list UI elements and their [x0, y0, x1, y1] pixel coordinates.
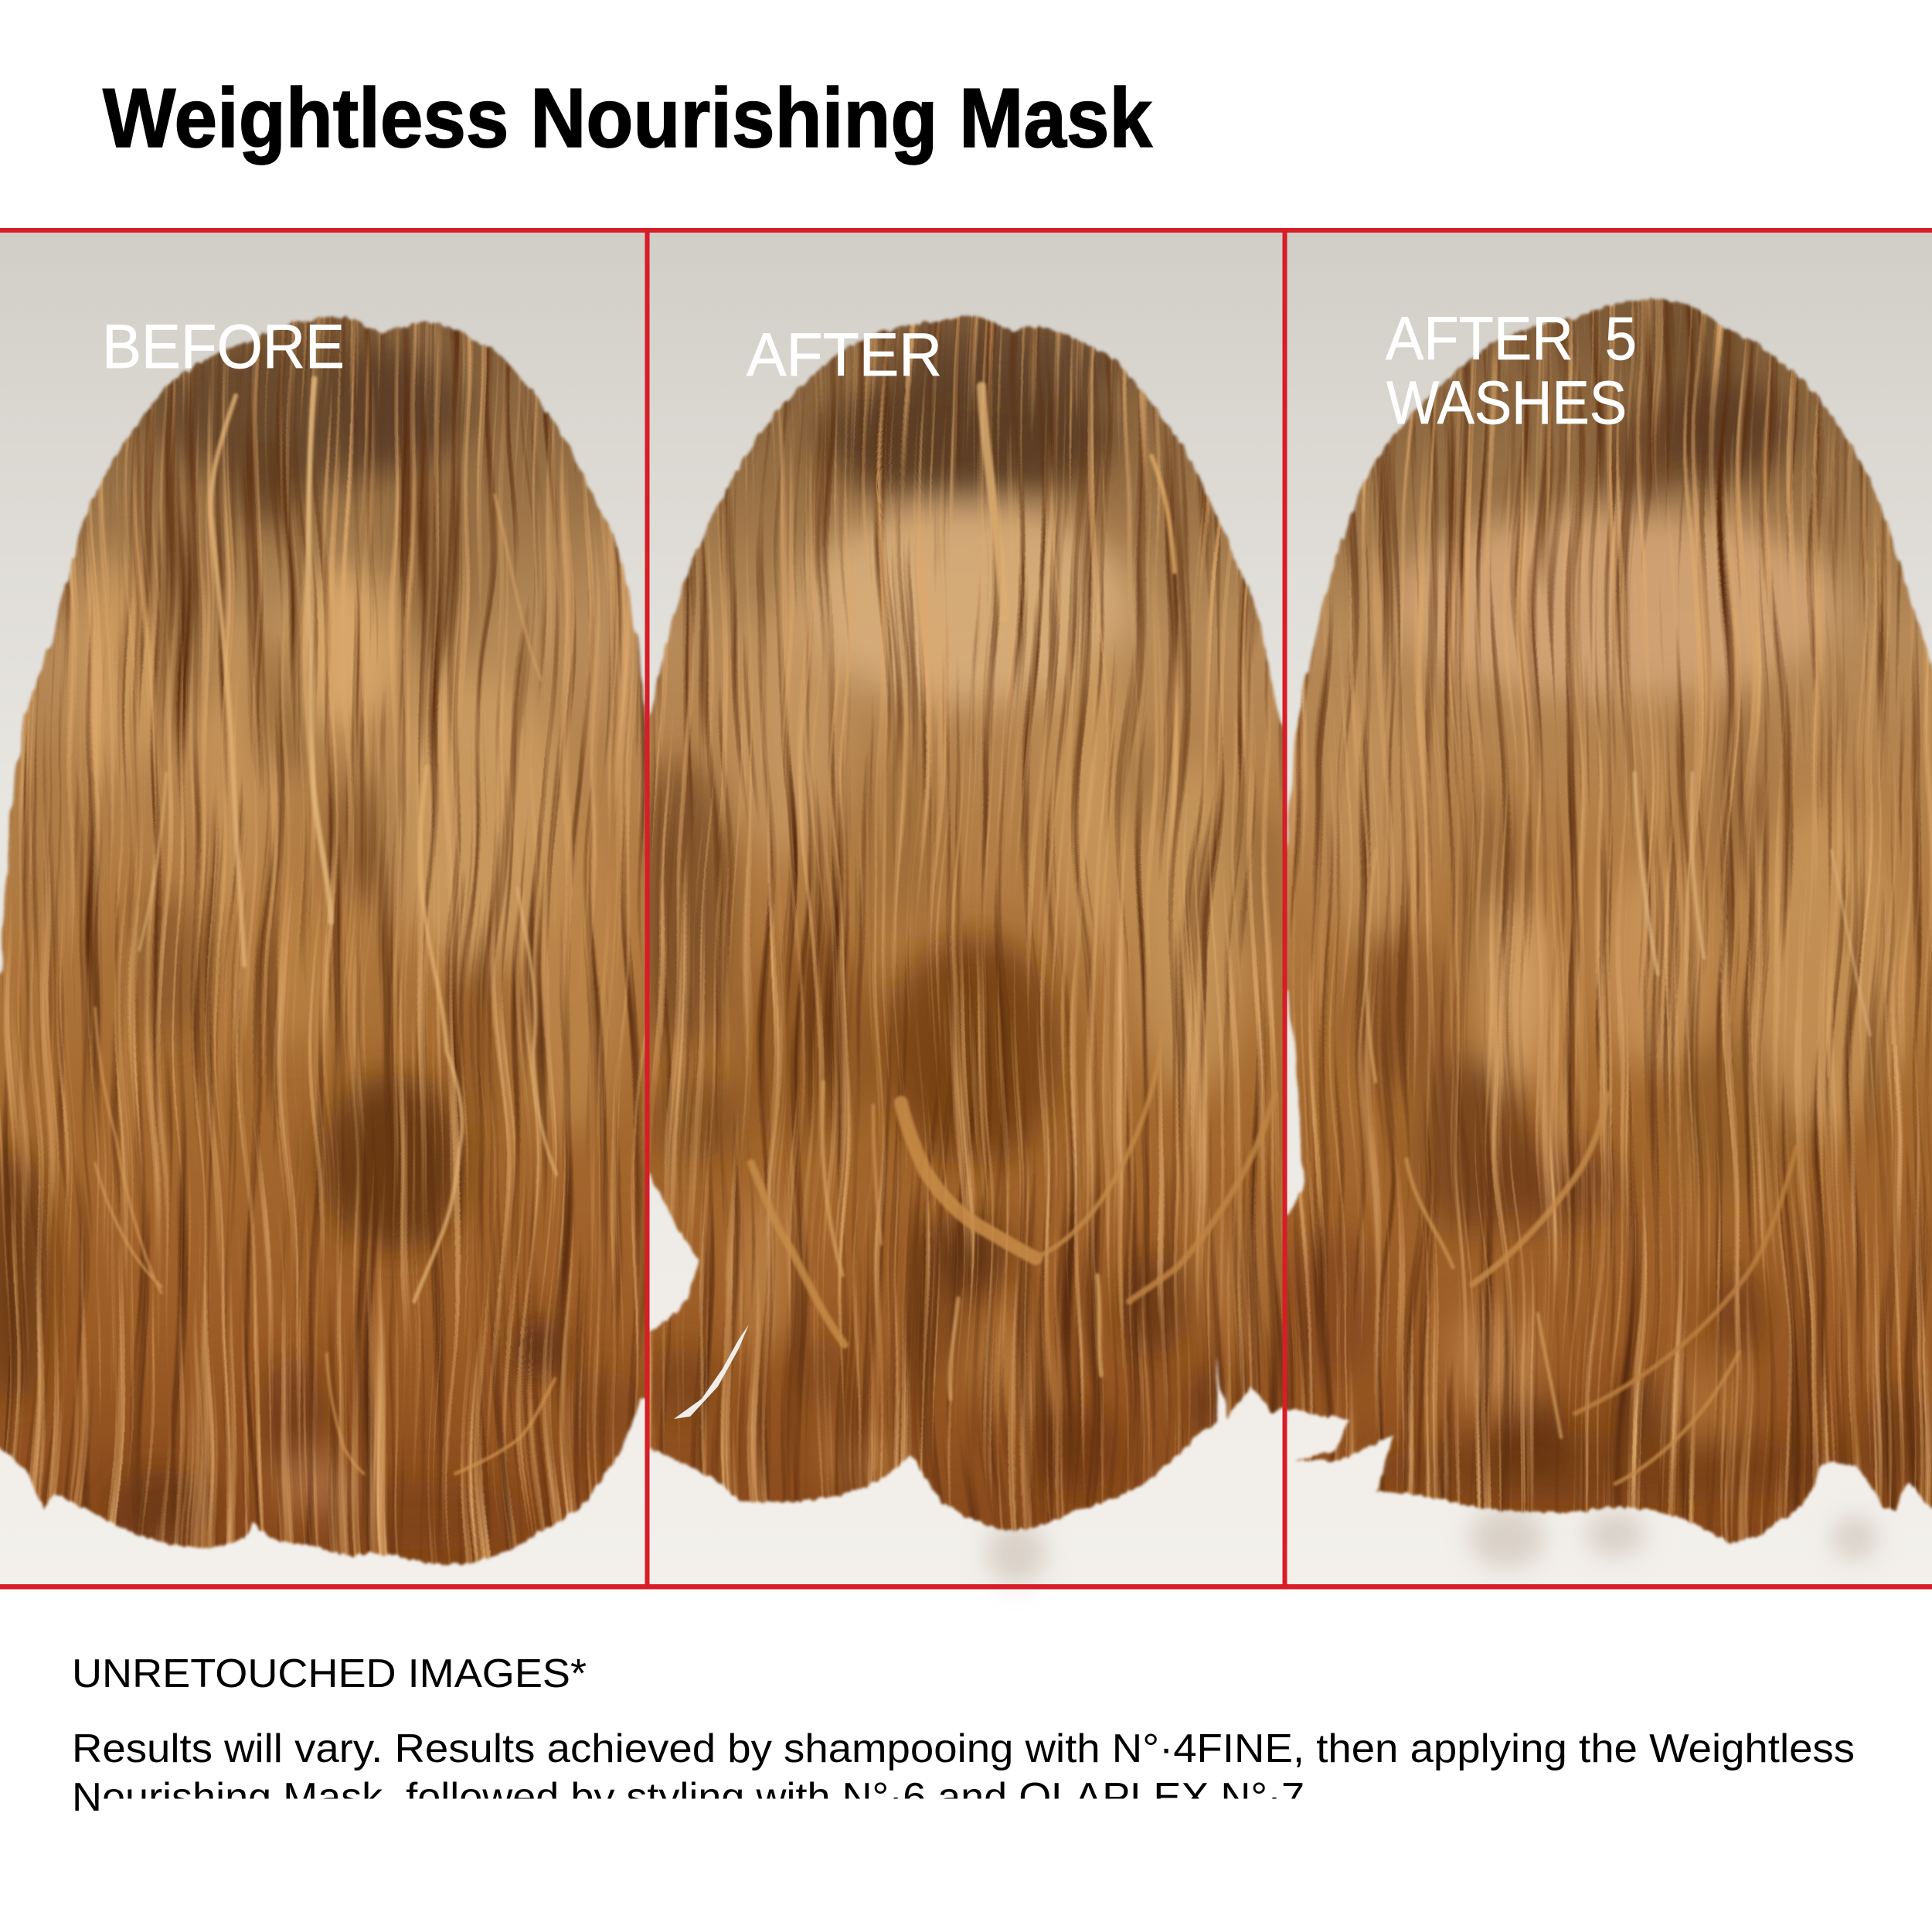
- footer disclaimer: Nourishing Mask, followed by styling with N°·6 and OLAPLEX N°·7.: [72, 1775, 1316, 1820]
- footer disclaimer: [72, 1726, 1855, 1820]
- footer heading: UNRETOUCHED IMAGES*: [72, 1651, 587, 1696]
- photo: hair after treatment: [649, 314, 1283, 1533]
- label: before: BEFORE: [102, 312, 345, 382]
- label: after: AFTER: [747, 320, 942, 389]
- panel: before: [0, 230, 649, 1587]
- label: after 5 washes: [1386, 304, 1637, 437]
- photo: hair before treatment: [0, 232, 649, 1584]
- footer disclaimer: Results will vary. Results achieved by shampooing with N°·4FINE, then applying the Weightless: [72, 1726, 1855, 1771]
- photo: hair after five washes: [1283, 232, 1932, 1584]
- label: after 5 washes: AFTER 5: [1386, 304, 1637, 372]
- label: after 5 washes: WASHES: [1386, 368, 1627, 437]
- panel: after: [631, 230, 1286, 1587]
- title: Weightless Nourishing Mask: [103, 71, 1152, 165]
- panel: after 5 washes: [1283, 230, 1932, 1587]
